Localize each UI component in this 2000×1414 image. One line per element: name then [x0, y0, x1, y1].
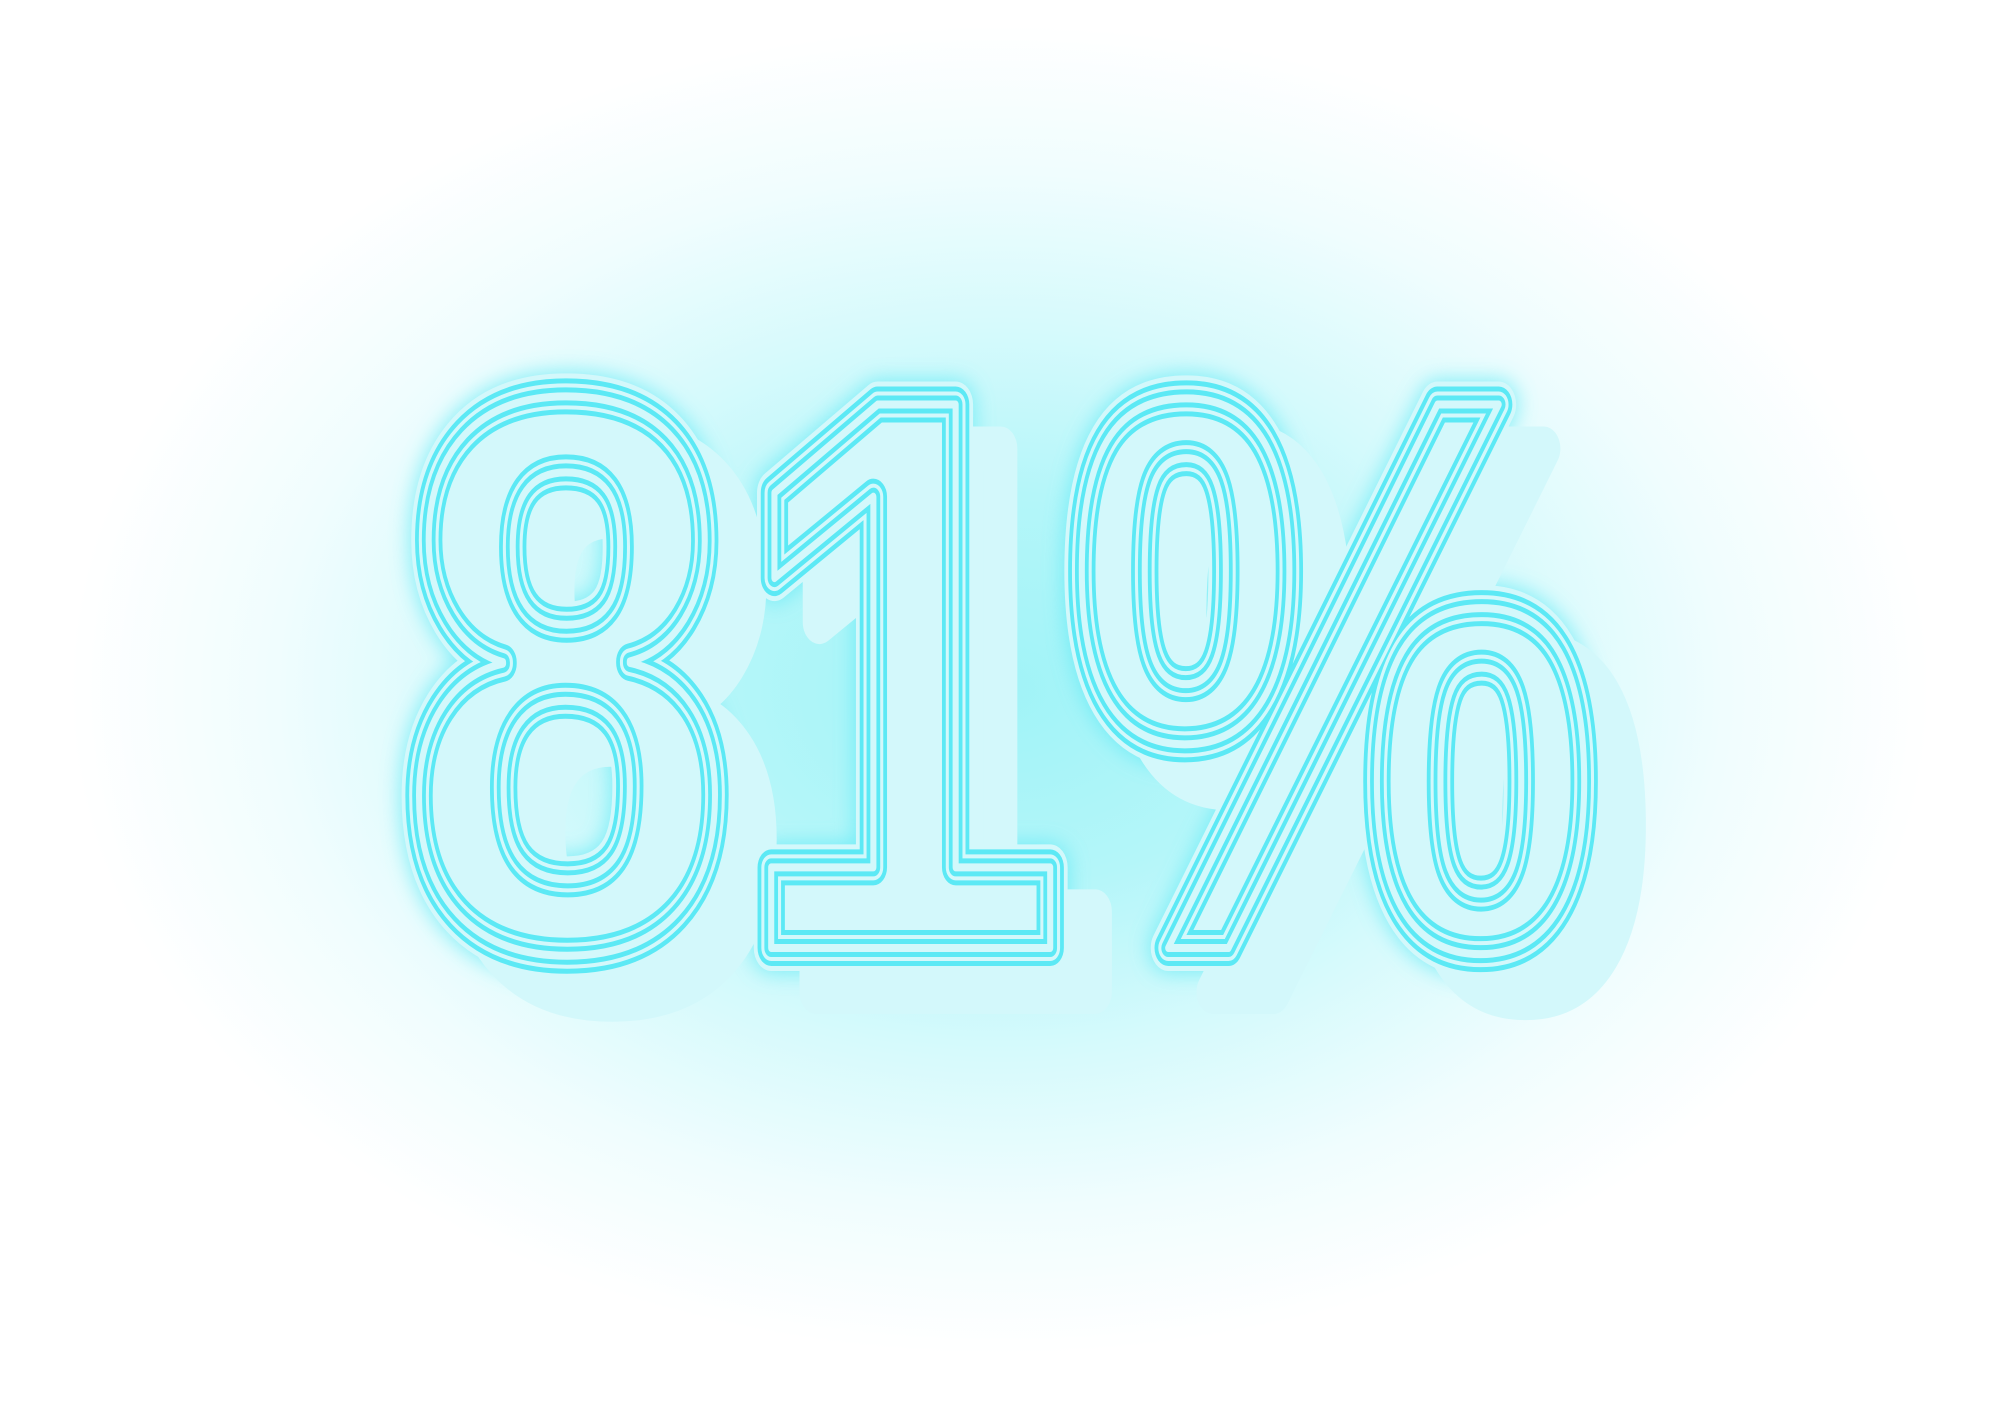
main text with concentric inline strokes: 81% — [400, 234, 1600, 1116]
main text with concentric inline strokes: 81% — [400, 234, 1600, 1116]
main text with concentric inline strokes: 81% — [400, 234, 1600, 1116]
main text with concentric inline strokes: 81% — [400, 234, 1600, 1116]
main text with concentric inline strokes: 81% — [400, 234, 1600, 1116]
glow halo: 81% — [400, 234, 1600, 1116]
shadow extrusion: 81% — [445, 278, 1645, 1160]
